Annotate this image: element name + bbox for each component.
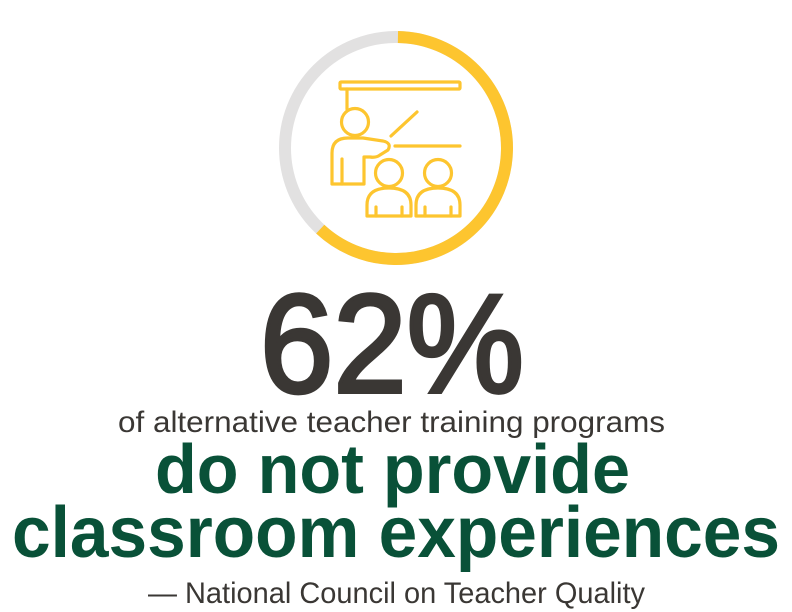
subtitle text: of alternative teacher training programs bbox=[118, 406, 665, 439]
headline line 2: classroom experiences bbox=[12, 493, 780, 573]
donut ring: 62% progress bbox=[283, 35, 509, 261]
big statistic 62%: 62% bbox=[260, 265, 524, 422]
source attribution: — National Council on Teacher Quality bbox=[148, 577, 645, 610]
headline line 1: do not provide bbox=[155, 430, 630, 508]
icon: teacher at board with students bbox=[332, 82, 460, 216]
